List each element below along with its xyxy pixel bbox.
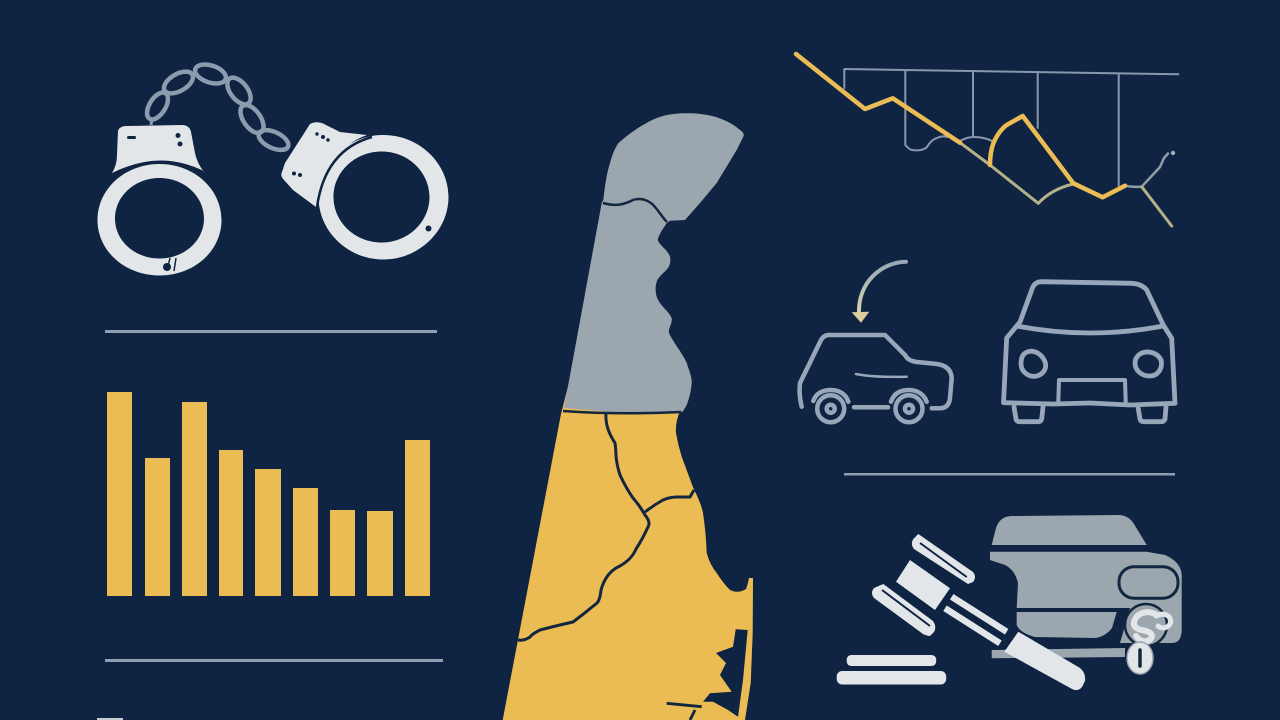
divider: left bottom [105,659,443,662]
icon: large car front view [1004,282,1175,422]
arrow [852,262,906,323]
icon: handcuffs [98,61,448,276]
line chart: gray tail [1125,154,1168,187]
map: county border branch [645,490,694,512]
gavel handle rails [945,597,1007,643]
gavel top cap [912,534,975,584]
car outline [1004,282,1175,405]
map: Delaware [503,113,753,720]
map: inland bays [703,629,748,717]
gray car body [990,552,1182,643]
map: county border north [603,199,667,222]
map: northern county (gray) [564,113,744,413]
icon: impounded car with gavel [837,515,1182,690]
car body side view [800,335,952,408]
right cuff [281,122,448,260]
map: county border middle [563,411,681,413]
line chart: end dot [1171,151,1175,155]
gray car roof [992,515,1147,545]
icon: small car with arrow [800,262,952,422]
door line [856,374,907,377]
line chart: yellow series [796,54,960,143]
bar chart [107,392,430,596]
bumper feet [1014,407,1166,422]
license plate [1058,380,1126,402]
car light [1119,567,1178,598]
line chart: yellow peak [990,116,1125,197]
map: county border south [518,414,649,640]
gavel head [896,560,950,610]
line chart: gray frame lines [844,69,1178,186]
divider: right [844,473,1175,476]
line chart: tan tail [1142,187,1172,226]
map: inlet lines [667,703,702,720]
gavel lower cap [872,584,935,636]
left cuff [98,125,222,276]
gavel [872,534,1085,690]
gavel base [837,671,946,684]
line chart: tan series [960,143,1073,203]
gavel sound block [847,655,936,666]
underbody [854,405,888,410]
bottom-left fragment [97,718,123,720]
headlights [1021,351,1046,376]
windshield base [1017,326,1163,333]
gray car sill [992,648,1125,658]
wheels [817,395,844,422]
map: southern counties (yellow) [503,367,753,720]
chain links [1125,604,1171,674]
wheel arches [813,390,927,402]
gavel lower slit [882,590,930,626]
gavel grip [1004,632,1085,690]
gray car bumper [1017,612,1117,638]
gavel top slit [920,543,967,577]
handcuff chain [143,61,291,154]
divider: left top [105,330,437,333]
line chart [796,54,1178,226]
